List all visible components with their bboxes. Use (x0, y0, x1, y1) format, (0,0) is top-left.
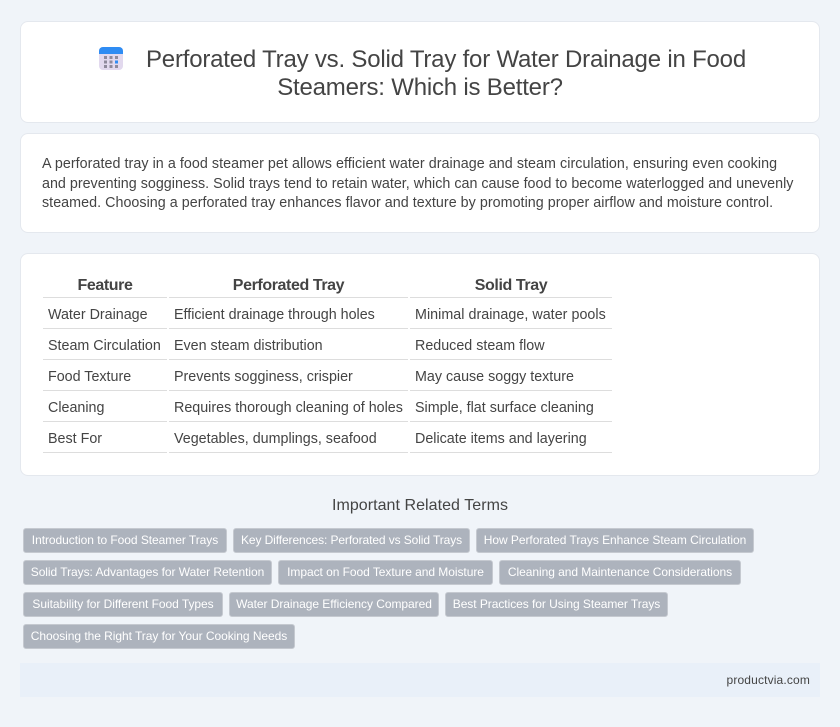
row: water drainage: Water Drainage (48, 307, 148, 323)
tag: Choosing the Right Tray for Your Cooking Needs (31, 629, 287, 643)
tag (23, 560, 272, 585)
tag: Best Practices for Using Steamer Trays (453, 597, 660, 611)
tag (23, 624, 295, 649)
footer source text: productvia.com (727, 673, 810, 687)
row: steam circulation: Reduced steam flow (415, 338, 545, 354)
heading: important related terms: Important Related Terms (332, 497, 508, 514)
tag: Solid Trays: Advantages for Water Retention (31, 565, 264, 579)
tag (233, 528, 470, 553)
panel: introduction (20, 133, 820, 233)
row: cleaning: Cleaning (48, 400, 104, 416)
row: food texture: May cause soggy texture (415, 369, 574, 385)
row: best for (43, 431, 612, 453)
tag: Water Drainage Efficiency Compared (236, 597, 432, 611)
tag (23, 528, 227, 553)
row: steam circulation: Even steam distribution (174, 338, 323, 354)
tag (23, 592, 223, 617)
tag (278, 560, 493, 585)
tag: Cleaning and Maintenance Considerations (508, 565, 732, 579)
text block: introduction: steamed. Choosing a perforated tray enhances flavor and texture by promoting proper airflow and moisture control. (42, 195, 773, 211)
tag (445, 592, 668, 617)
row: cleaning: Simple, flat surface cleaning (415, 400, 594, 416)
table: feature comparison (43, 277, 612, 453)
panel: comparison table (20, 253, 820, 476)
tag (229, 592, 439, 617)
row: cleaning: Requires thorough cleaning of holes (174, 400, 403, 416)
footer bar (20, 663, 820, 697)
text block: introduction: and preventing sogginess. Solid trays tend to retain water, which can cause food to become waterlogged and unevenly (42, 176, 793, 192)
tag: Key Differences: Perforated vs Solid Trays (241, 533, 462, 547)
row: water drainage: Minimal drainage, water pools (415, 307, 606, 323)
row: best for: Delicate items and layering (415, 431, 587, 447)
tag (476, 528, 754, 553)
tag (499, 560, 741, 585)
tag: Impact on Food Texture and Moisture (287, 565, 484, 579)
tag: How Perforated Trays Enhance Steam Circulation (484, 533, 746, 547)
icon: calendar (99, 47, 123, 70)
row: steam circulation (43, 338, 612, 360)
text block: introduction: A perforated tray in a food steamer pet allows efficient water drainage and steam circulation, ensuring even cooking (42, 156, 777, 172)
heading: title: Perforated Tray vs. Solid Tray for Water Drainage in Food (146, 46, 746, 73)
heading: title (146, 46, 746, 101)
row: food texture: Prevents sogginess, crispier (174, 369, 353, 385)
text block: introduction (42, 156, 794, 211)
row: water drainage (43, 307, 612, 329)
row: water drainage: Efficient drainage through holes (174, 307, 375, 323)
tag: Introduction to Food Steamer Trays (32, 533, 218, 547)
row: best for: Best For (48, 431, 102, 447)
table header: Perforated Tray (233, 277, 344, 294)
row: food texture (43, 369, 612, 391)
row: cleaning (43, 400, 612, 422)
tag: Suitability for Different Food Types (32, 597, 214, 611)
table header (43, 277, 612, 298)
table header: Feature (78, 277, 132, 294)
row: food texture: Food Texture (48, 369, 131, 385)
heading: title: Steamers: Which is Better? (277, 74, 563, 101)
row: best for: Vegetables, dumplings, seafood (174, 431, 377, 447)
row: steam circulation: Steam Circulation (48, 338, 161, 354)
table header: Solid Tray (475, 277, 547, 294)
tags: related terms (23, 528, 754, 649)
panel: title header (20, 21, 820, 123)
